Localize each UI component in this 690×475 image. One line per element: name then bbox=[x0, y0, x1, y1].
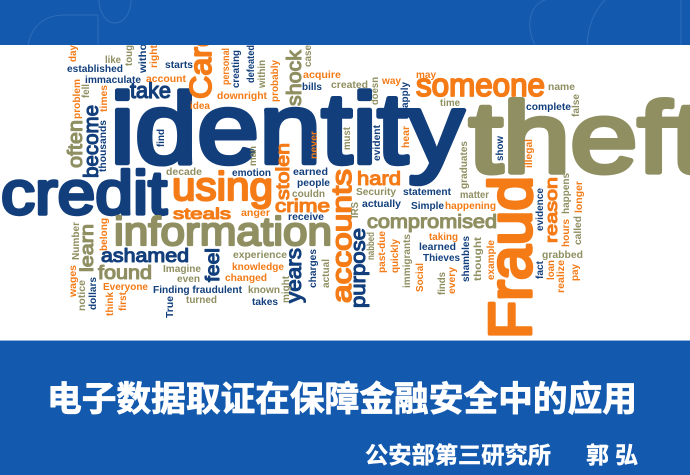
words: small olive: tough bbox=[124, 39, 135, 66]
words: medium olive: often bbox=[65, 120, 87, 168]
words: small olive: known bbox=[248, 285, 280, 296]
words: small olive: doesn bbox=[370, 77, 381, 105]
words: small orange: times bbox=[99, 85, 110, 112]
words: small orange: past-due bbox=[377, 231, 388, 273]
words: small blue: apply bbox=[400, 82, 411, 108]
words: small olive: graduates bbox=[459, 141, 470, 189]
words: small blue: learned bbox=[419, 242, 456, 253]
words: medium olive: shock bbox=[284, 49, 306, 106]
words: medium blue: ashamed bbox=[101, 246, 189, 267]
words: small blue: show bbox=[495, 136, 506, 161]
words: small olive: within bbox=[257, 60, 268, 89]
words: small orange: problem bbox=[72, 79, 83, 119]
words: small blue: evident bbox=[372, 124, 383, 161]
words: medium orange: crime bbox=[275, 196, 330, 216]
word: compromised: compromised bbox=[367, 212, 497, 233]
words: small blue: dollars bbox=[88, 277, 99, 310]
words: small olive: like bbox=[105, 55, 121, 66]
words: small orange: think bbox=[105, 292, 116, 316]
author: 郭 弘 bbox=[586, 442, 638, 468]
words: small orange: right bbox=[149, 44, 160, 68]
words: small olive: immigrants bbox=[402, 234, 413, 288]
words: small blue: Simple bbox=[411, 201, 444, 212]
words: small blue: defeated bbox=[246, 45, 257, 83]
words: medium olive: found bbox=[98, 263, 152, 284]
words: small blue bbox=[67, 32, 571, 318]
words: small blue: earned bbox=[293, 167, 328, 178]
words: small orange: belong bbox=[99, 218, 110, 251]
words: small orange: example bbox=[486, 240, 497, 280]
words: medium orange: stolen bbox=[273, 143, 293, 200]
words: medium orange bbox=[173, 143, 561, 243]
title: 电子数据取证在保障金融安全中的应用 bbox=[47, 380, 637, 419]
bottom blue band bbox=[0, 340, 690, 475]
words: small olive: finds bbox=[437, 272, 448, 295]
words: small orange: acquire bbox=[303, 70, 341, 81]
words: small olive: actual bbox=[321, 259, 332, 288]
words: small blue: receive bbox=[288, 212, 324, 223]
top blue band bbox=[0, 0, 690, 45]
words: small orange: Everyone bbox=[103, 282, 148, 293]
word: using: using bbox=[172, 165, 273, 209]
word: take: take bbox=[130, 78, 171, 103]
words: small olive: turned bbox=[186, 295, 217, 306]
words: small blue: people bbox=[297, 178, 330, 189]
words: small orange: personal bbox=[221, 48, 232, 85]
words: small orange: hear bbox=[401, 126, 412, 148]
words: small blue: complete bbox=[526, 102, 571, 113]
words: small olive: must bbox=[342, 126, 353, 150]
words: medium orange: hard bbox=[357, 169, 401, 190]
word: information: information bbox=[114, 210, 332, 254]
words: small olive: Imagine bbox=[163, 264, 201, 275]
words: small blue: shambles bbox=[461, 236, 472, 282]
words: small blue: statement bbox=[403, 187, 452, 198]
words: medium olive bbox=[65, 49, 306, 284]
words: medium blue: purpose bbox=[348, 228, 370, 308]
words: small olive: grabbed bbox=[542, 250, 583, 261]
words: medium blue: feel bbox=[203, 248, 224, 282]
words: small orange: way bbox=[381, 76, 401, 87]
words: small orange: every bbox=[447, 267, 458, 294]
words: small orange bbox=[68, 44, 585, 316]
words: small olive: experience bbox=[233, 250, 287, 261]
words: small blue: without bbox=[138, 32, 149, 74]
words: small olive bbox=[71, 39, 584, 311]
words: small orange: changed bbox=[225, 273, 267, 284]
words: small blue: thousands bbox=[98, 120, 109, 172]
words: small blue: Finding fraudulent bbox=[153, 285, 243, 296]
words: small orange: realize bbox=[556, 260, 567, 293]
words: small olive: fell bbox=[81, 84, 92, 98]
word: someone: someone bbox=[416, 67, 545, 103]
words: medium olive: learn bbox=[77, 224, 97, 272]
words: small olive: notice bbox=[77, 280, 88, 311]
words: small olive: IRS bbox=[350, 202, 361, 218]
word: credit: credit bbox=[1, 159, 167, 227]
words: small blue: evidence bbox=[535, 188, 546, 231]
words: small olive: decade bbox=[166, 167, 202, 178]
words: small orange: downright bbox=[217, 91, 268, 102]
words: small olive: might bbox=[281, 275, 292, 303]
words: small orange: may bbox=[416, 70, 436, 81]
words: small olive: even bbox=[177, 274, 200, 285]
words: small orange: quickly bbox=[390, 239, 401, 273]
words: small blue: established bbox=[67, 64, 123, 75]
words: small blue: takes bbox=[252, 297, 278, 308]
words: small olive: Security bbox=[356, 187, 396, 198]
words: small orange: loan bbox=[546, 260, 557, 280]
words: small olive: false bbox=[571, 94, 582, 117]
words: small orange: wages bbox=[68, 265, 79, 298]
words: small olive: called bbox=[573, 216, 584, 245]
words: small olive: matter bbox=[460, 190, 489, 201]
words: small orange: anger bbox=[241, 208, 270, 219]
words: small orange: hours bbox=[561, 219, 572, 247]
words: small orange: Social bbox=[415, 263, 426, 292]
words: small orange: first bbox=[118, 291, 129, 311]
words: small orange: taking bbox=[429, 232, 458, 243]
words: small blue: find bbox=[156, 129, 167, 147]
words: small orange: account bbox=[146, 74, 187, 85]
words: small blue: bills bbox=[302, 82, 322, 93]
words: small orange: happening bbox=[445, 201, 496, 212]
word: accounts: accounts bbox=[326, 169, 357, 303]
words: small blue: Thieves bbox=[423, 253, 460, 264]
words: small olive: happens bbox=[561, 173, 572, 214]
words: small orange: knowledge bbox=[232, 262, 284, 273]
words: medium blue: years bbox=[283, 248, 306, 303]
words: small orange: day bbox=[68, 45, 79, 62]
words: small olive: created bbox=[331, 80, 368, 91]
words: small blue: actually bbox=[362, 199, 401, 210]
words: small olive: case bbox=[303, 45, 314, 67]
words: small orange: never bbox=[309, 131, 320, 159]
words: small blue: immaculate bbox=[85, 75, 141, 86]
words: small blue: charges bbox=[308, 249, 319, 288]
words: small orange: idea bbox=[190, 101, 210, 112]
words: small olive: nabbed bbox=[366, 232, 377, 260]
word: Fraud: Fraud bbox=[477, 176, 544, 339]
institute: 公安部第三研究所 bbox=[365, 442, 551, 468]
words: medium blue bbox=[81, 105, 370, 308]
words: small orange: illegal bbox=[524, 139, 535, 168]
word: theft: theft bbox=[469, 82, 690, 194]
words: small olive: time bbox=[440, 98, 460, 109]
words: small orange: probably bbox=[270, 60, 281, 102]
words: medium orange: reason bbox=[542, 177, 561, 243]
words: small olive: couldn bbox=[292, 189, 325, 200]
words: small blue: fact bbox=[535, 260, 546, 279]
word cloud bbox=[1, 29, 690, 339]
words: small blue: True bbox=[165, 296, 176, 318]
words: small blue: emotion bbox=[232, 168, 271, 179]
words: small olive: thought bbox=[473, 236, 484, 281]
words: small olive: Number bbox=[71, 222, 82, 260]
word: Care: Care bbox=[183, 29, 218, 99]
words: small olive: man bbox=[248, 146, 259, 166]
words: small blue: creating bbox=[231, 50, 242, 88]
words: small orange: pay bbox=[570, 264, 581, 281]
words: small olive: name bbox=[548, 82, 575, 93]
words: small orange: longer bbox=[574, 181, 585, 213]
words: medium blue: become bbox=[81, 105, 103, 178]
words: small blue: starts bbox=[165, 60, 193, 71]
words: medium orange: steals bbox=[173, 206, 231, 223]
word: identity: identity bbox=[110, 73, 464, 185]
